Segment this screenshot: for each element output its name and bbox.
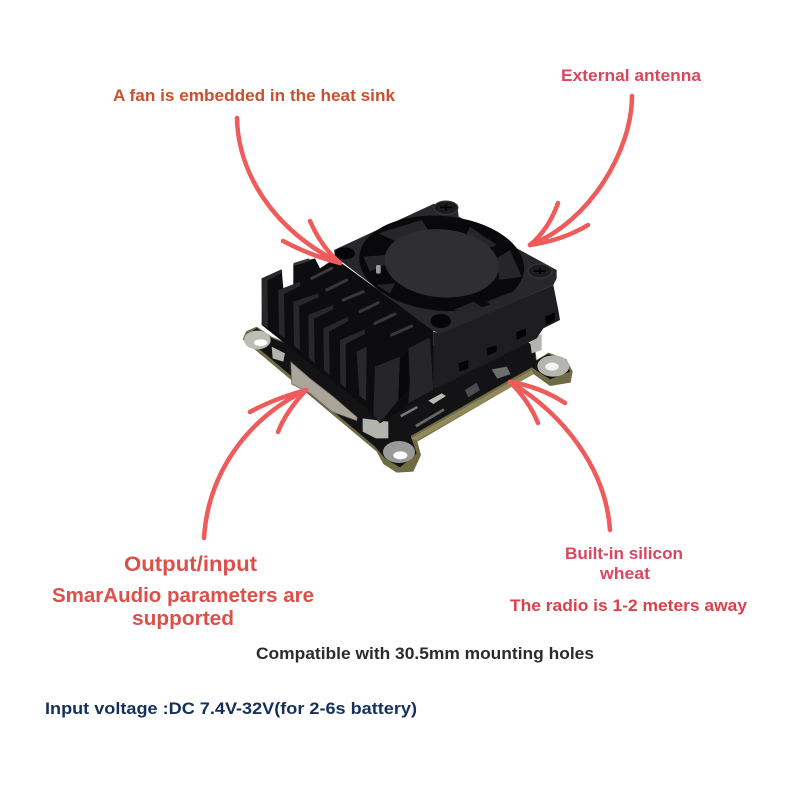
side fin ends [262, 269, 367, 401]
heat sink body [262, 258, 433, 423]
bolt visible in fan [376, 265, 381, 274]
label: built-in antenna: wheat [599, 564, 650, 583]
label: radio range: The radio is 1-2 meters away [510, 596, 748, 615]
board components [428, 393, 446, 404]
label: SmartAudio support [52, 585, 314, 630]
arrow: output/input connector [204, 390, 306, 538]
standoffs [272, 334, 542, 438]
product photo: VTX module with heat sink and fan [243, 201, 573, 473]
fan housing [334, 201, 560, 388]
fan recess [355, 209, 528, 318]
front fin faces [373, 357, 400, 423]
label: output/input: Output/input [124, 553, 257, 576]
arrow: built-in antenna [510, 382, 610, 530]
label: mounting holes: Compatible with 30.5mm mounting holes [256, 644, 594, 663]
empty screw hole: front [430, 314, 451, 328]
screw: right [528, 264, 552, 278]
fan hub [382, 224, 502, 302]
label: SmartAudio support: SmarAudio parameters are [52, 585, 314, 607]
label: SmartAudio support: supported [132, 608, 234, 630]
label: built-in antenna [565, 544, 683, 583]
rear fin ridges [295, 260, 412, 335]
mounting ear: bottom [383, 441, 415, 463]
label: external antenna: External antenna [561, 66, 702, 85]
arrow: fan [237, 118, 340, 263]
label: input voltage: Input voltage :DC 7.4V-32V(for 2-6s battery) [45, 699, 417, 718]
label: fan: A fan is embedded in the heat sink [113, 86, 396, 105]
fan side wall [433, 285, 560, 388]
mounting ear: left [244, 331, 271, 349]
empty screw hole: left [335, 247, 355, 259]
label: built-in antenna: Built-in silicon [565, 544, 683, 563]
mounting ear: right [537, 355, 569, 377]
fan top plate [334, 204, 557, 334]
arrow: antenna [530, 96, 632, 245]
circuit board [243, 327, 573, 473]
white connectors [291, 362, 357, 421]
fan blades [363, 220, 522, 312]
screw: top [434, 201, 458, 214]
